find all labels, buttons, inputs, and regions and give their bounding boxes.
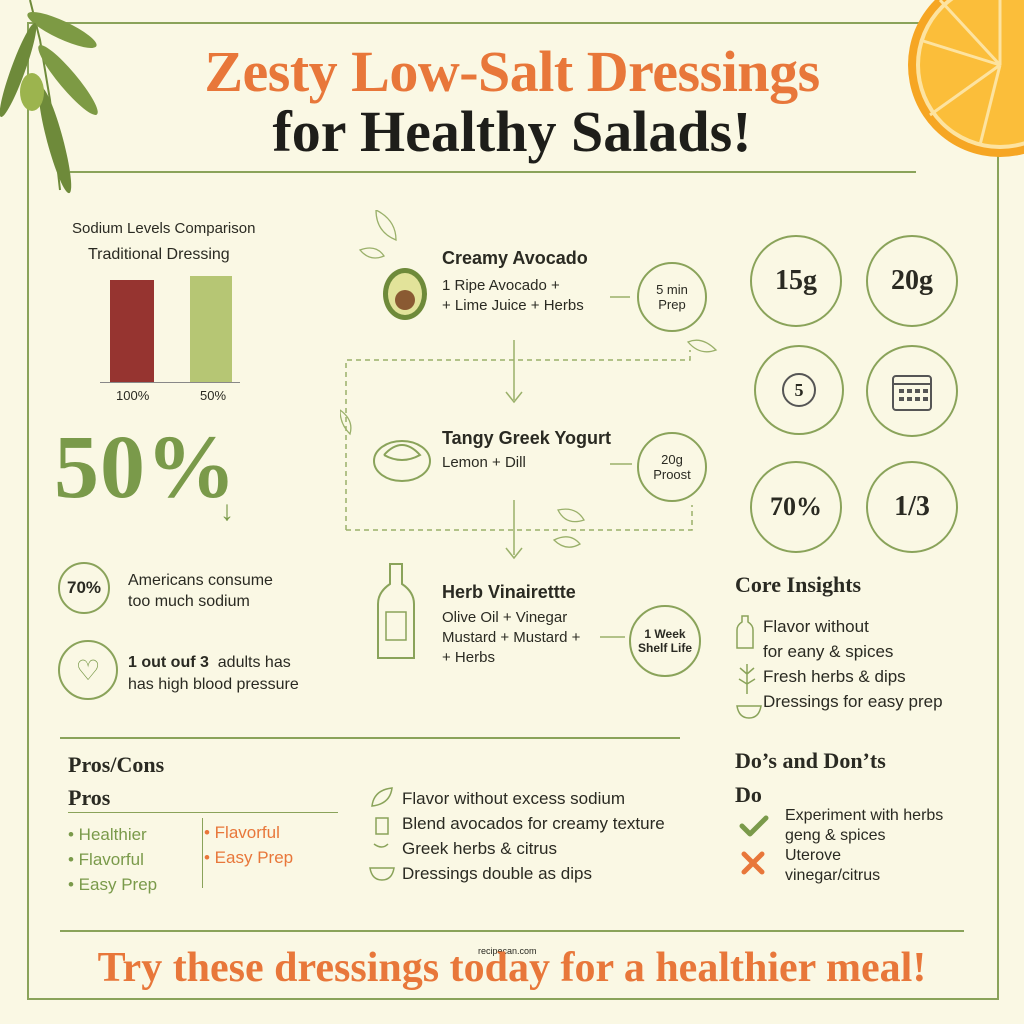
pros/cons: Pros (68, 785, 110, 810)
decoration: olive branch (0, 0, 98, 194)
flow: recipes: 1 Week (644, 627, 686, 641)
core insights: Flavor without (763, 617, 869, 636)
core insights: Fresh herbs & dips (763, 667, 906, 686)
stat: 1 out of 3: 1 out ouf 3 adults has (128, 654, 291, 671)
do's and don'ts: Uterove (785, 847, 841, 864)
tips list: Blend avocados for creamy texture (402, 814, 665, 833)
core insights: Dressings for easy prep (763, 692, 943, 711)
tips list: Flavor without excess sodium (402, 789, 625, 808)
flow: recipes: Proost (653, 467, 691, 482)
flow: recipes: + Herbs (442, 649, 495, 666)
tips list (369, 787, 665, 883)
flow: recipes: Mustard + Mustard + (442, 629, 580, 646)
core insights (735, 572, 943, 719)
chart: sodium levels: Traditional Dressing (88, 246, 230, 263)
chart: sodium levels: 100% (116, 388, 149, 403)
tips list: Dressings double as dips (402, 864, 592, 883)
stat circles grid: 5 (794, 380, 804, 400)
text: ↓ (220, 495, 234, 526)
flow: recipes: Olive Oil + Vinegar (442, 609, 567, 626)
chart: sodium levels: Sodium Levels Comparison (72, 220, 255, 237)
flow: recipes: Creamy Avocado (442, 248, 588, 268)
flow: recipes: Prep (658, 297, 686, 312)
pros/cons: Pros/Cons (68, 752, 164, 777)
title (204, 39, 820, 164)
stat: 1 out of 3: ♡ (75, 654, 101, 686)
core insights: for eany & spices (763, 642, 893, 661)
stat: 70% (58, 562, 273, 614)
flow: recipes (340, 210, 718, 677)
do's and don'ts: Do (735, 782, 762, 807)
do's and don'ts: geng & spices (785, 827, 886, 844)
stat: 1 out of 3 (58, 640, 299, 700)
core insights: Core Insights (735, 572, 861, 597)
chart: sodium levels: 50% (200, 388, 226, 403)
stat circles grid: 1/3 (894, 491, 930, 522)
icon: bottle (377, 563, 415, 659)
pros/cons: • Healthier (68, 825, 147, 844)
title: Zesty Low-Salt Dressings (204, 39, 820, 104)
flow: recipes: Tangy Greek Yogurt (442, 428, 611, 448)
icon: yogurt (373, 440, 431, 482)
do's and don'ts: vinegar/citrus (785, 867, 880, 884)
stat: 70%: too much sodium (128, 593, 250, 610)
stat: 70%: Americans consume (128, 572, 273, 589)
pros/cons: • Easy Prep (68, 875, 157, 894)
stat circles grid (750, 235, 958, 553)
flow: recipes: 20g (661, 452, 683, 467)
flow: recipes: 5 min (656, 282, 688, 297)
flow: recipes: Lemon + Dill (442, 454, 526, 471)
stat circles grid: 20g (891, 265, 933, 296)
stat circles grid: 15g (775, 265, 817, 296)
text: recipecan.com (478, 946, 537, 956)
title: for Healthy Salads! (272, 99, 752, 164)
do's and don'ts: Do’s and Don’ts (735, 748, 886, 773)
pros/cons: • Easy Prep (204, 848, 293, 867)
do's and don'ts (735, 748, 943, 884)
big stat 50%: 50% (54, 418, 237, 517)
decoration: orange slice (908, 0, 1024, 157)
flow: recipes: + Lime Juice + Herbs (442, 297, 584, 314)
footer call to action: Try these dressings today for a healthier meal! (98, 945, 926, 991)
icon: avocado (383, 268, 427, 320)
do's and don'ts: Experiment with herbs (785, 807, 943, 824)
flow: recipes: Shelf Life (638, 641, 692, 655)
stat circles grid: 70% (770, 492, 822, 521)
pros/cons: • Flavorful (204, 823, 280, 842)
chart: sodium levels (72, 220, 255, 403)
tips list: Greek herbs & citrus (402, 839, 557, 858)
stat: 1 out of 3: has high blood pressure (128, 676, 299, 693)
pros/cons (68, 752, 338, 894)
flow: recipes: 1 Ripe Avocado + (442, 277, 560, 294)
flow: recipes: Herb Vinairettte (442, 582, 576, 602)
pros/cons: • Flavorful (68, 850, 144, 869)
stat: 70%: 70% (67, 578, 101, 597)
